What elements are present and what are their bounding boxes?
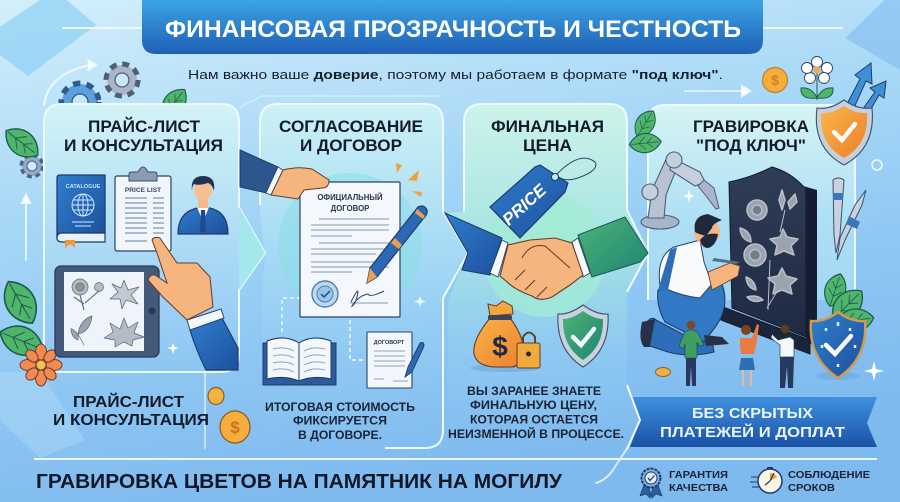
subtitle: Нам важно ваше доверие , поэтому мы работаем в формате "под ключ" .	[188, 67, 723, 82]
panel 2 caption: В ДОГОВОРЕ.	[298, 428, 382, 442]
icon: engraving tools	[833, 178, 866, 260]
icon: blue shield	[811, 312, 865, 380]
icon: pointing hand	[148, 237, 238, 370]
panel 1 caption	[53, 392, 209, 429]
title bar	[142, 0, 763, 54]
official contract document: ОФИЦИАЛЬНЫЙ	[317, 193, 383, 202]
panel 3 caption: ВЫ ЗАРАНЕЕ ЗНАЕТЕ	[467, 384, 601, 398]
icon: sparkle on panel 2	[414, 296, 426, 307]
icon: price tag: PRICE	[499, 180, 550, 229]
icon: coins: $	[230, 418, 240, 437]
icon: orange rays	[396, 163, 422, 197]
official contract document	[300, 182, 400, 317]
panel 3 heading	[491, 118, 604, 155]
icon: catalogue book: CATALOGUE	[66, 184, 101, 190]
panel 3 caption: КОТОРАЯ ОСТАЕТСЯ	[470, 412, 598, 426]
backdrop circle behind handshake	[483, 193, 607, 317]
panel 4: turnkey engraving card	[648, 105, 855, 300]
panel 1 heading: ПРАЙС-ЛИСТ	[88, 117, 200, 136]
quality guarantee label: ГАРАНТИЯ	[669, 469, 728, 481]
panel 3 caption: ФИНАЛЬНУЮ ЦЕНУ,	[470, 398, 597, 412]
icon: small contract with pen	[367, 332, 424, 388]
panel 2 heading	[279, 118, 423, 155]
panel 2 caption: ФИКСИРУЕТСЯ	[293, 414, 387, 428]
icon: money bag with lock: $	[492, 331, 508, 362]
icon: consultant	[178, 176, 228, 234]
title bar: ФИНАНСОВАЯ ПРОЗРАЧНОСТЬ И ЧЕСТНОСТЬ	[165, 16, 741, 43]
icon: gears top left	[62, 65, 137, 120]
connector dashes	[282, 298, 364, 360]
icon: fountain pen	[367, 206, 427, 283]
icon: open book	[263, 338, 336, 385]
deadlines label	[788, 469, 870, 494]
ribbon banner: ПЛАТЕЖЕЙ И ДОПЛАТ	[660, 423, 845, 441]
illustration: three small people	[656, 320, 794, 388]
contract backdrop circle	[278, 173, 422, 317]
ribbon banner	[627, 385, 877, 449]
panel 3 caption	[448, 384, 624, 441]
icon: price list clipboard	[115, 167, 171, 251]
footer divider	[34, 458, 877, 460]
icon: tombstone with engraved flowers	[721, 167, 817, 354]
icon: top right coin: $	[771, 72, 779, 88]
deadlines label: СРОКОВ	[788, 482, 835, 494]
panel 2 caption: ИТОГОВАЯ СТОИМОСТЬ	[265, 400, 415, 414]
icon: orange shield	[816, 100, 872, 165]
panel 3 heading: ЦЕНА	[523, 137, 572, 155]
icon: orange flower	[20, 344, 62, 386]
icon: leaves near blue shield	[820, 271, 875, 334]
icon: white flower	[801, 56, 833, 100]
panel 2 heading: СОГЛАСОВАНИЕ	[279, 118, 423, 136]
illustration: engraver worker	[640, 214, 740, 355]
icon: leaves between panels	[628, 106, 662, 154]
icon: price tag	[490, 158, 596, 238]
icon: small contract with pen: ДОГОВОРТ	[374, 340, 405, 346]
deadlines label: СОБЛЮДЕНИЕ	[788, 469, 870, 481]
panel 3 caption: НЕИЗМЕННОЙ В ПРОЦЕССЕ.	[448, 426, 624, 441]
icon: quality rosette	[640, 468, 662, 498]
panel 1 heading	[64, 117, 223, 155]
icon: tablet with flower sketches	[55, 266, 159, 357]
quality guarantee label	[669, 469, 728, 494]
icon: decorative leaves left	[0, 83, 193, 362]
panel 3: final price card	[447, 104, 648, 449]
ribbon banner: БЕЗ СКРЫТЫХ	[692, 405, 813, 422]
icon: money bag with lock	[470, 301, 540, 372]
panel 4 heading: ГРАВИРОВКА	[693, 118, 809, 136]
icon: stopwatch	[750, 467, 782, 493]
panel 1 caption: ПРАЙС-ЛИСТ	[73, 392, 184, 411]
panel 4 heading	[693, 118, 809, 155]
panel 2 heading: И ДОГОВОР	[300, 137, 402, 155]
icon: small gear left	[22, 156, 42, 176]
quality guarantee label: КАЧЕСТВА	[669, 482, 728, 494]
panel 3 heading: ФИНАЛЬНАЯ	[491, 118, 604, 136]
icon: coins	[208, 388, 250, 443]
icon: sparkle and ring	[864, 160, 884, 381]
icon: sparkle on panel 4	[683, 190, 695, 202]
icon: upward arrows	[846, 63, 886, 114]
official contract document: ДОГОВОР	[331, 204, 369, 213]
icon: robot arm	[641, 152, 719, 229]
panel 1: price list card	[44, 104, 265, 372]
icon: hand holding contract	[240, 150, 329, 199]
icon: green shield	[558, 305, 608, 367]
icon: top right coin	[762, 68, 788, 92]
panel 4 heading: "ПОД КЛЮЧ"	[696, 137, 806, 155]
footer heading: ГРАВИРОВКА ЦВЕТОВ НА ПАМЯТНИК НА МОГИЛУ	[36, 471, 563, 493]
icon: price list clipboard: PRICE LIST	[125, 187, 161, 194]
panel 2: contract card	[260, 104, 468, 448]
icon: sparkle on panel 1	[167, 343, 179, 354]
panel 2 caption	[265, 400, 415, 442]
panel 1 heading: И КОНСУЛЬТАЦИЯ	[64, 137, 223, 155]
icon: catalogue book	[57, 175, 105, 248]
icon: handshake	[445, 213, 648, 299]
panel 1 caption: И КОНСУЛЬТАЦИЯ	[53, 412, 209, 429]
